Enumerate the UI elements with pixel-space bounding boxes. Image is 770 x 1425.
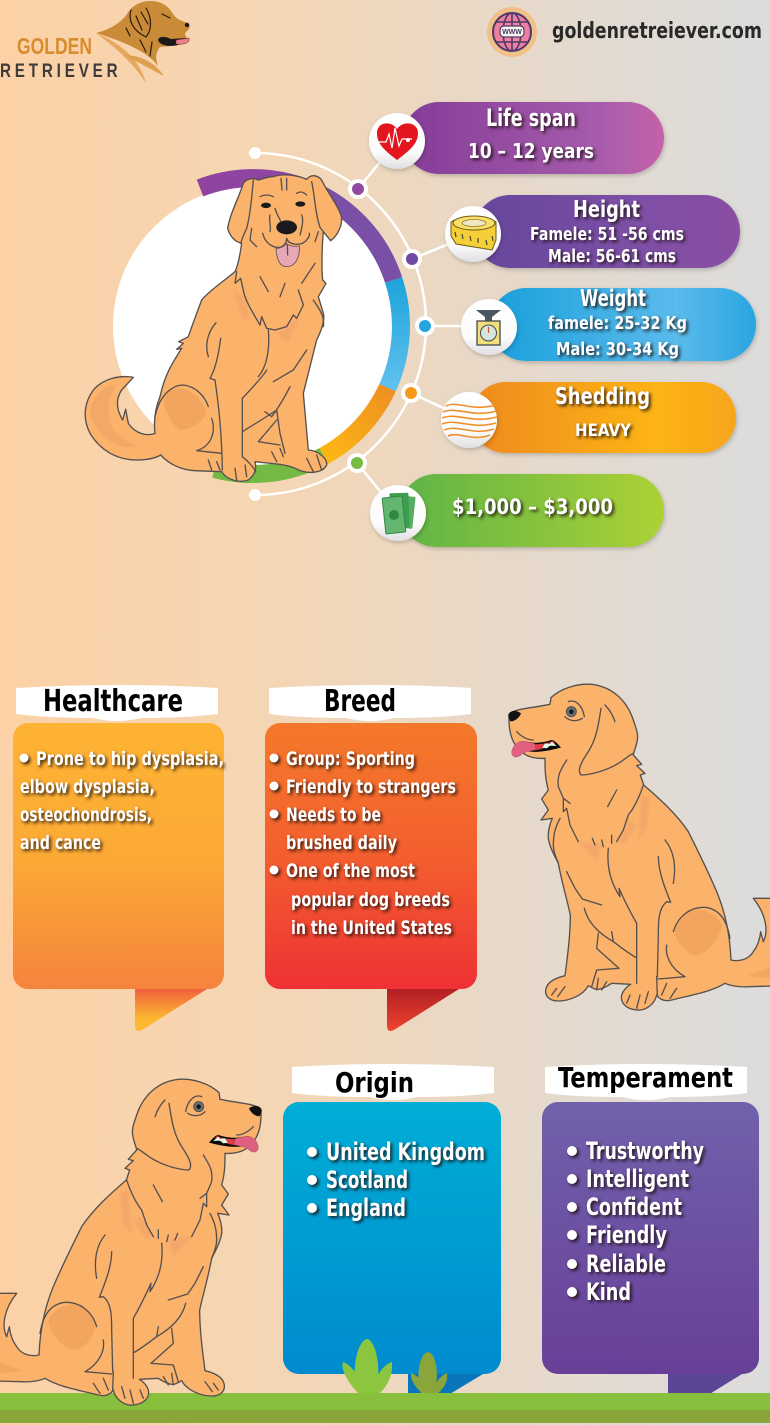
panel: temperament: [542, 1061, 759, 1400]
text: weight values: Male: 30-34 Kg: [556, 339, 679, 360]
text: origin list: England: [326, 1194, 406, 1222]
icon: scale: [461, 299, 517, 355]
node: life span: [348, 179, 368, 199]
text: weight values: [548, 286, 687, 360]
text: healthcare list: and cance: [20, 832, 101, 854]
text: origin list: Scotland: [326, 1166, 408, 1194]
heading: origin: [292, 1064, 494, 1100]
plant: small: [411, 1352, 447, 1393]
text: height values: Height: [573, 197, 640, 223]
icon: globe www: [487, 7, 537, 57]
text: breed list: Friendly to strangers: [286, 776, 456, 798]
illustration: front-facing golden retriever: [85, 175, 342, 481]
callout tail: [408, 1374, 483, 1400]
callout tail: [668, 1374, 742, 1400]
callout tail: [135, 989, 207, 1031]
ground: [0, 1393, 770, 1423]
infographic: connector arc and nodes: [249, 141, 489, 513]
heading: origin: Origin: [335, 1066, 414, 1099]
panel: healthcare: [13, 684, 224, 1031]
icon: measuring tape: [445, 206, 501, 262]
text: healthcare list: osteochondrosis,: [20, 804, 152, 826]
node: price: [347, 453, 367, 473]
text: height values: Male: 56-61 cms: [548, 246, 676, 267]
heading: breed: [269, 684, 471, 721]
text: weight values: famele: 25-32 Kg: [548, 313, 687, 334]
heading: breed: Breed: [324, 684, 396, 719]
panel: price: [400, 474, 664, 547]
illustration: side golden retriever facing right: [0, 1079, 262, 1405]
text: shedding value: Shedding: [555, 384, 650, 410]
text: shedding value: [555, 384, 650, 441]
text: life span value: 10 – 12 years: [468, 139, 594, 163]
text: healthcare list: Prone to hip dysplasia,: [36, 748, 224, 770]
logo: golden retriever: [0, 1, 190, 83]
ring chart and white circle: [113, 178, 401, 474]
icon: logo dog head: [96, 1, 190, 83]
illustration: side golden retriever facing left: [508, 684, 770, 1010]
text: life span value: Life span: [486, 104, 576, 132]
icon: globe www: WWW: [502, 29, 522, 36]
text: breed list: One of the most: [286, 860, 415, 882]
text: temperament list: Friendly: [586, 1221, 667, 1249]
logo text: RETRIEVER: RETRIEVER: [0, 59, 118, 81]
panel: weight: [490, 286, 756, 361]
icon: money: [370, 485, 426, 541]
text: breed list: brushed daily: [286, 832, 397, 854]
text: life span value: [468, 104, 594, 163]
text: breed list: [270, 748, 456, 939]
text: temperament list: Confident: [586, 1193, 682, 1221]
text: shedding value: HEAVY: [575, 421, 632, 441]
node: weight: [415, 316, 435, 336]
text: origin list: United Kingdom: [326, 1138, 485, 1166]
heading: temperament: Temperament: [558, 1061, 733, 1094]
text: weight values: Weight: [580, 286, 646, 312]
panel: life span: [403, 102, 664, 174]
panel: origin: [283, 1064, 501, 1400]
logo text: GOLDEN: GOLDEN: [17, 33, 92, 59]
text: temperament list: Trustworthy: [586, 1137, 704, 1165]
website badge: [487, 7, 762, 57]
text: healthcare list: [20, 748, 224, 854]
text: breed list: popular dog breeds: [291, 889, 450, 911]
icon: waves: [441, 392, 497, 448]
text: breed list: in the United States: [291, 917, 452, 939]
node: shedding: [401, 383, 421, 403]
text: breed list: Group: Sporting: [286, 748, 415, 770]
text: height values: [530, 197, 684, 267]
text: temperament list: Intelligent: [586, 1165, 689, 1193]
plant: large: [342, 1339, 392, 1393]
panel: height: [474, 195, 740, 268]
node: height: [402, 249, 422, 269]
icon: heart: [369, 113, 425, 169]
text: temperament list: Kind: [586, 1278, 631, 1306]
text: height values: Famele: 51 -56 cms: [530, 224, 684, 245]
text: healthcare list: elbow dysplasia,: [20, 776, 155, 798]
panel: shedding: [471, 382, 736, 453]
callout tail: [387, 989, 459, 1031]
text: price value: $1,000 – $3,000: [452, 495, 613, 519]
heading: healthcare: Healthcare: [43, 684, 183, 719]
text: temperament list: [567, 1137, 704, 1306]
text: origin list: [307, 1138, 485, 1222]
text: breed list: Needs to be: [286, 804, 381, 826]
panel: breed: [265, 684, 477, 1031]
text: temperament list: Reliable: [586, 1250, 666, 1278]
